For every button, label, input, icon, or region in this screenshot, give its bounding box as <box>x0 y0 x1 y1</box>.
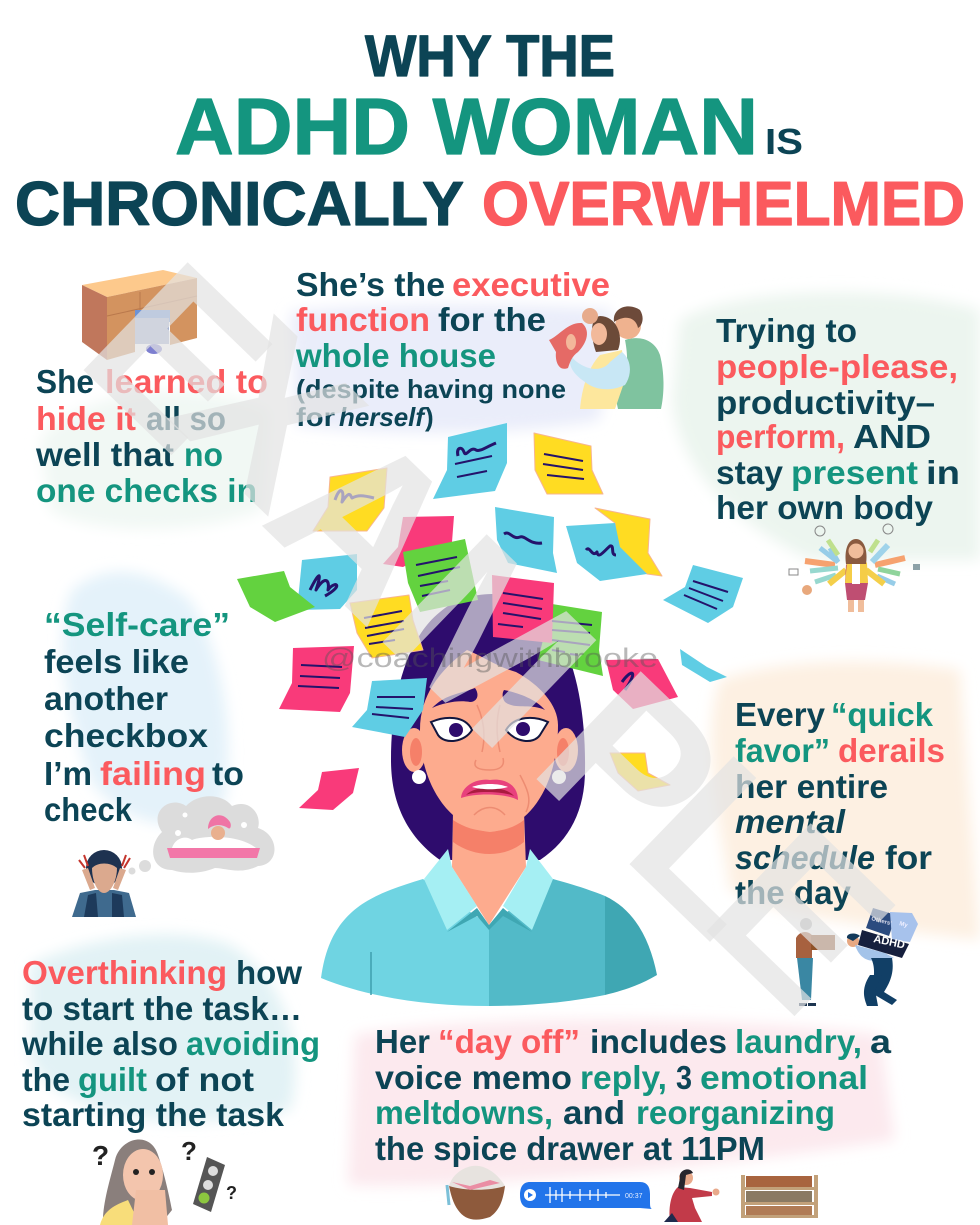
eyebrows <box>432 688 545 710</box>
icon: carrying others' tasks: My <box>898 921 909 929</box>
text: overthinking: how <box>236 954 302 991</box>
text: hide it: hide it <box>36 400 136 437</box>
watermark: EXAMPLE: E <box>40 219 314 495</box>
text: executive function: whole house <box>295 337 496 374</box>
text: overthinking: guilt <box>78 1061 147 1098</box>
watermark: EXAMPLE: M <box>339 491 639 792</box>
text: executive function: function <box>296 301 430 338</box>
text: overthinking: to start the task… <box>22 990 302 1027</box>
icon: family with baby <box>549 306 664 409</box>
icon: multitasking woman with arrows <box>789 524 920 612</box>
text: self-care: feels like <box>44 643 189 680</box>
text: people please: people-please, <box>716 348 958 385</box>
hair <box>391 594 585 860</box>
collar <box>424 849 553 930</box>
eyes <box>431 718 548 741</box>
text: hide it: well that <box>35 436 174 473</box>
icon: carrying others' tasks <box>796 908 918 1006</box>
text: executive function: for the <box>438 301 546 338</box>
text: executive function: She’s the <box>296 266 445 303</box>
text: people please: her own body <box>716 489 934 526</box>
text: hide it: She <box>36 363 94 400</box>
text: self-care: failing <box>100 755 206 792</box>
text: people please <box>716 312 960 526</box>
text: day off: emotional <box>700 1059 868 1096</box>
watermark: EXAMPLE <box>40 219 937 1056</box>
text: day off: Her <box>375 1023 430 1060</box>
text: day off: “day off” <box>438 1023 580 1060</box>
text: people please: stay <box>716 454 784 491</box>
text: people please: Trying to <box>716 312 857 349</box>
icon: kneeling crying woman <box>664 1169 720 1222</box>
icon: anxious woman with questions and traffic light <box>92 1136 237 1225</box>
text: self-care: check <box>44 791 133 828</box>
icon: voice memo bubble: 00:37 <box>625 1193 643 1200</box>
text: executive function: executive <box>452 266 610 303</box>
text: hide it: no <box>184 436 223 473</box>
text: quick favor: schedule <box>735 839 875 876</box>
sticky notes <box>237 423 743 810</box>
text: executive function <box>295 266 610 432</box>
icon: voice memo bubble <box>520 1182 652 1209</box>
watermark: EXAMPLE: L <box>586 713 851 980</box>
text: day off: reply, <box>580 1059 667 1096</box>
title: IS <box>765 121 803 162</box>
icon: anxious woman with questions and traffic light: ? <box>92 1140 109 1171</box>
icon: anxious woman with questions and traffic light: ? <box>226 1183 237 1203</box>
text: quick favor: Every <box>735 696 826 733</box>
mouth <box>461 780 518 800</box>
icon: stressed woman holding head <box>72 850 136 917</box>
wrinkles and nose <box>474 705 529 815</box>
text: people please: perform, <box>716 418 845 455</box>
text: people please: productivity– <box>716 384 935 421</box>
text: day off: laundry, <box>735 1023 862 1060</box>
text: self-care <box>44 606 244 828</box>
text: overthinking: while also <box>21 1025 178 1062</box>
text: self-care: I’m <box>44 755 92 792</box>
watermark: EXAMPLE: X <box>132 276 406 552</box>
text: overthinking: Overthinking <box>22 954 227 991</box>
text: self-care: “Self-care” <box>44 606 230 643</box>
text: day off: and <box>563 1094 625 1131</box>
text: quick favor <box>735 696 945 911</box>
icon: carrying others' tasks: Others’ <box>870 916 893 927</box>
text: overthinking: avoiding <box>186 1025 320 1062</box>
text: hide it: learned to <box>105 363 268 400</box>
text: day off: 3 <box>676 1059 692 1096</box>
watermark: EXAMPLE: E <box>663 780 937 1056</box>
illustration: overwhelmed woman <box>321 594 657 1006</box>
ears and earrings <box>402 728 578 784</box>
text: day off: the spice drawer at 11PM <box>375 1130 765 1167</box>
title <box>15 24 965 239</box>
text: day off <box>375 1023 892 1167</box>
icon: spice shelf <box>741 1175 818 1218</box>
icon: thought cloud with bathtub <box>128 796 274 874</box>
text: day off: a <box>870 1023 892 1060</box>
text: day off: voice memo <box>375 1059 572 1096</box>
title: ADHD WOMAN <box>175 82 758 171</box>
text: hide it: all so <box>146 400 226 437</box>
title: CHRONICALLY <box>15 170 464 239</box>
watermark: EXAMPLE: A <box>225 381 507 665</box>
text: overthinking: the <box>22 1061 70 1098</box>
watermark: EXAMPLE: P <box>493 628 767 904</box>
icon: carrying others' tasks: ADHD <box>872 933 906 952</box>
text: quick favor: favor” <box>735 732 830 769</box>
neck <box>452 812 526 925</box>
text: overthinking: of not <box>155 1061 254 1098</box>
text: self-care: to <box>212 755 244 792</box>
text: executive function: herself <box>339 402 426 432</box>
text: quick favor: derails <box>838 732 945 769</box>
text: day off: includes <box>590 1023 727 1060</box>
text: hide it <box>35 363 268 509</box>
text: executive function: (despite having none <box>296 374 566 404</box>
text: people please: AND <box>853 418 931 455</box>
icon: person hiding under desk <box>82 270 197 360</box>
text: quick favor: mental <box>735 803 846 840</box>
text: people please: present <box>791 454 918 491</box>
text: quick favor: “quick <box>831 696 934 733</box>
text: self-care: another <box>44 680 168 717</box>
icon: laundry basket <box>447 1166 505 1220</box>
background washes <box>30 292 980 1186</box>
watermark: handle: @coachingwithbrooke <box>322 643 658 673</box>
shirt <box>321 879 657 1006</box>
text: quick favor: for <box>885 839 932 876</box>
text: self-care: checkbox <box>44 717 209 754</box>
title: OVERWHELMED <box>482 170 965 239</box>
text: day off: reorganizing <box>636 1094 835 1131</box>
title: WHY THE <box>365 24 615 89</box>
face <box>420 650 558 832</box>
text: overthinking <box>21 954 320 1133</box>
text: day off: meltdowns, <box>375 1094 553 1131</box>
text: quick favor: her entire <box>735 768 888 805</box>
text: executive function: for <box>296 402 335 432</box>
text: overthinking: starting the task <box>22 1096 285 1133</box>
text: hide it: one checks in <box>36 472 257 509</box>
text: people please: in <box>926 454 960 491</box>
icon: anxious woman with questions and traffic light: ? <box>181 1136 197 1166</box>
text: quick favor: the day <box>735 874 852 911</box>
text: executive function: ) <box>425 402 434 432</box>
